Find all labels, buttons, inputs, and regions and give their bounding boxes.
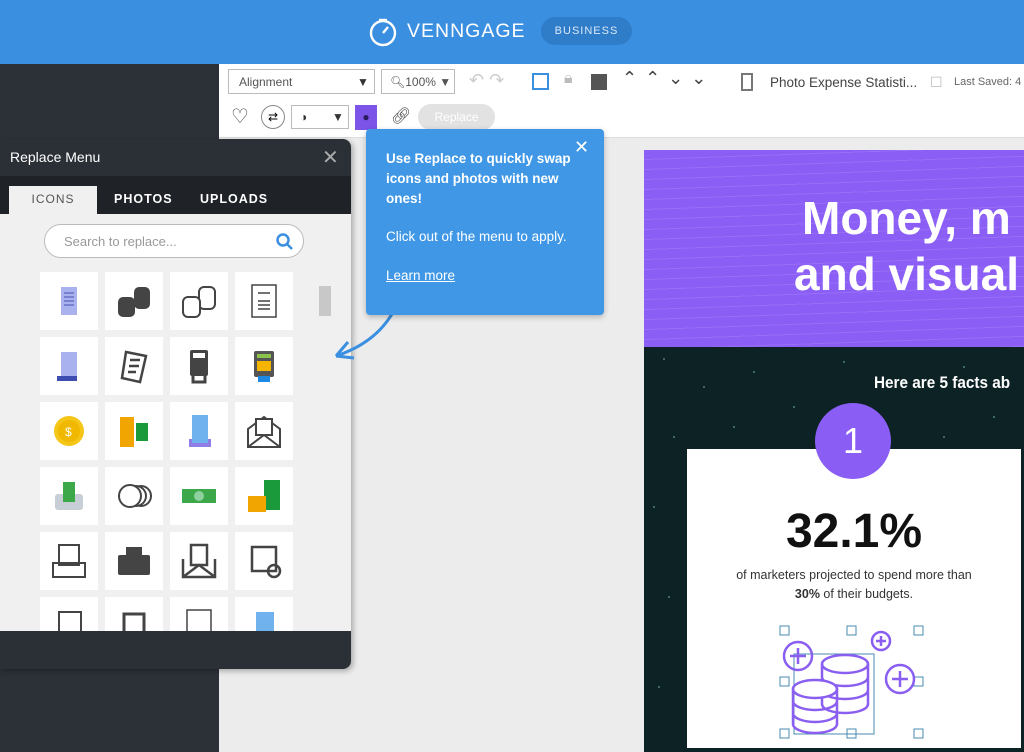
top bar (0, 0, 1024, 64)
fact card (687, 449, 1021, 748)
tabs: PHOTOS (114, 192, 173, 206)
panel header: ✕ (322, 147, 339, 169)
tabs: UPLOADS (200, 192, 268, 206)
coin icon with selection (780, 626, 924, 738)
icon grid: $ (65, 425, 72, 439)
arrow (334, 315, 393, 360)
toolbar: ⇄ (268, 110, 278, 124)
panel header (0, 139, 351, 176)
toolbar: ♡ (231, 106, 249, 128)
toolbar: ● (362, 110, 370, 124)
panel footer (0, 631, 351, 669)
header band (644, 150, 1024, 347)
title (794, 192, 1019, 300)
tooltip: Learn more (386, 268, 455, 283)
business badge: BUSINESS (555, 25, 618, 37)
scrollbar (319, 286, 331, 316)
search box (44, 224, 304, 258)
business badge (541, 17, 632, 45)
toolbar: ▼ (357, 75, 369, 89)
search box: Search to replace... (64, 234, 177, 249)
tabs: ICONS (31, 192, 74, 206)
left sidebar (0, 64, 219, 752)
description (736, 568, 972, 601)
number badge: 1 (843, 420, 863, 461)
replace menu panel (0, 139, 351, 669)
starfield (653, 358, 995, 688)
toolbar: ⌃⌃⌄⌄ (622, 68, 714, 88)
panel header: Replace Menu (10, 149, 100, 165)
toolbar: 🔍︎100% ▼ (390, 75, 451, 89)
toolbar (219, 64, 1024, 138)
toolbar: ◑ (300, 110, 307, 124)
toolbar: ↶ ↷ (469, 70, 504, 90)
tooltip: Use Replace to quickly swap icons and photos with new ones! (386, 151, 571, 206)
number badge (815, 403, 891, 479)
tabs (0, 176, 351, 214)
toolbar: 🔒︎ (564, 70, 573, 87)
toolbar: Photo Expense Statisti... (770, 75, 917, 90)
big number: 32.1% (786, 505, 922, 558)
toolbar: Alignment (239, 75, 292, 89)
title: Money, m (802, 192, 1011, 244)
toolbar: Last Saved: 4 (954, 76, 1021, 88)
title: and visual (794, 248, 1019, 300)
toolbar: ☐ (930, 74, 943, 90)
toolbar: ▼ (332, 110, 344, 124)
description: 30% of their budgets. (795, 587, 913, 601)
subtitle: Here are 5 facts ab (874, 373, 1010, 392)
tooltip: Click out of the menu to apply. (386, 229, 567, 244)
icon grid (40, 272, 293, 631)
logo text: VENNGAGE (407, 20, 526, 42)
infographic canvas (644, 150, 1024, 752)
toolbar: Replace (434, 110, 479, 124)
logo icon (370, 18, 396, 46)
toolbar: 🔗︎ (391, 108, 411, 125)
tooltip: ✕ (574, 137, 589, 157)
description: of marketers projected to spend more than (736, 568, 972, 582)
tooltip (366, 129, 604, 315)
